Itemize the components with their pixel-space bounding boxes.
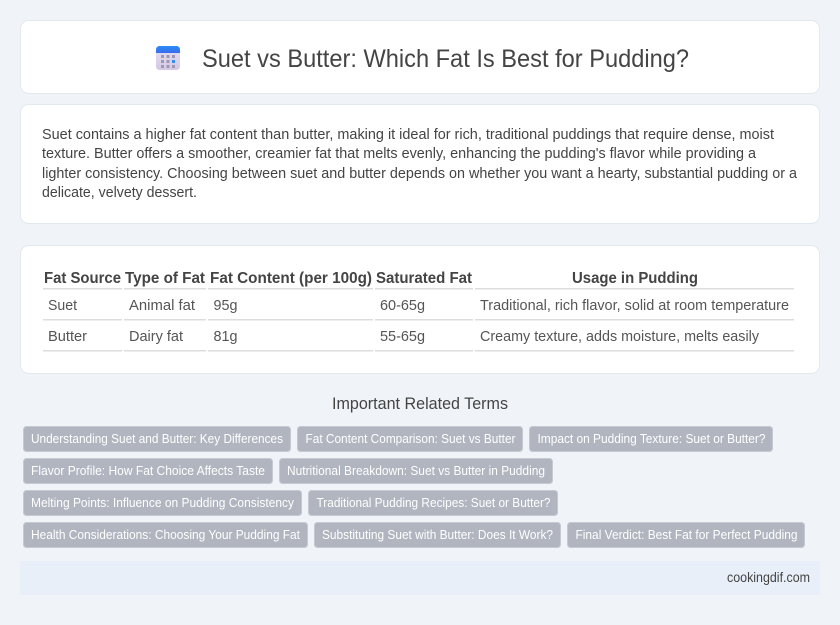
tag: Understanding Suet and Butter: Key Differences xyxy=(31,432,283,446)
icon: calendar xyxy=(156,46,180,70)
tag xyxy=(530,426,772,452)
title: Suet vs Butter: Which Fat Is Best for Pudding? xyxy=(202,45,689,73)
tag: Nutritional Breakdown: Suet vs Butter in Pudding xyxy=(287,464,545,478)
panel: intro text: texture. Butter offers a smoother, creamier fat that melts evenly, enhancing the pudding's flavor while providing a xyxy=(42,146,757,162)
tag xyxy=(298,426,522,452)
tag: Fat Content Comparison: Suet vs Butter xyxy=(306,432,516,446)
table header: Fat Content (per 100g) xyxy=(210,270,372,287)
tag xyxy=(308,490,558,516)
table row: suet xyxy=(43,298,794,320)
tag xyxy=(24,490,302,516)
panel: intro text xyxy=(20,104,820,224)
table row: suet: 60-65g xyxy=(380,298,425,314)
table row: butter xyxy=(43,329,794,352)
tag xyxy=(568,522,804,548)
tag: Health Considerations: Choosing Your Pudding Fat xyxy=(31,528,300,542)
panel: comparison table xyxy=(20,246,820,374)
tag: Melting Points: Influence on Pudding Consistency xyxy=(31,496,295,510)
header panel xyxy=(20,20,820,94)
tag: Impact on Pudding Texture: Suet or Butter? xyxy=(538,432,766,446)
footer: cookingdif.com xyxy=(727,570,810,585)
table header: Type of Fat xyxy=(125,270,205,287)
tag: Substituting Suet with Butter: Does It Work? xyxy=(322,528,553,542)
panel: intro text: Suet contains a higher fat content than butter, making it ideal for rich, traditional puddings that require dense, moist xyxy=(42,127,774,143)
table header: Fat Source xyxy=(44,270,121,287)
tag xyxy=(24,522,308,548)
table row: suet: 95g xyxy=(214,298,238,314)
table row: butter: Creamy texture, adds moisture, melts easily xyxy=(480,329,760,345)
tag xyxy=(24,458,272,484)
table header: Saturated Fat xyxy=(376,270,472,287)
table header: Usage in Pudding xyxy=(572,270,698,287)
footer xyxy=(20,561,820,595)
tag xyxy=(314,522,560,548)
table row: butter: Butter xyxy=(48,329,87,345)
panel: intro text: lighter consistency. Choosing between suet and butter depends on whether you want a hearty, substantial pudding or a xyxy=(42,166,798,182)
table header xyxy=(43,270,794,290)
tag xyxy=(280,458,552,484)
tag: Final Verdict: Best Fat for Perfect Pudding xyxy=(576,528,798,542)
tag: Flavor Profile: How Fat Choice Affects Taste xyxy=(31,464,265,478)
tag: Traditional Pudding Recipes: Suet or Butter? xyxy=(316,496,550,510)
panel: intro text: delicate, velvety dessert. xyxy=(42,185,197,201)
table row: butter: 55-65g xyxy=(380,329,425,345)
table row: suet: Animal fat xyxy=(129,298,195,314)
table row: suet: Suet xyxy=(48,298,77,314)
tag xyxy=(24,426,290,452)
table row: butter: Dairy fat xyxy=(129,329,183,345)
related term tags xyxy=(24,426,804,548)
heading: related terms: Important Related Terms xyxy=(332,395,508,413)
table row: butter: 81g xyxy=(214,329,238,345)
table row: suet: Traditional, rich flavor, solid at room temperature xyxy=(480,298,789,314)
